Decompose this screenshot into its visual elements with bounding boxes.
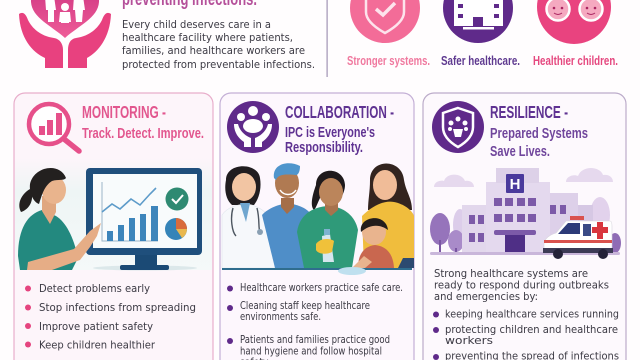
nurse bbox=[18, 168, 101, 270]
bullet list: monitoring bbox=[25, 283, 196, 352]
label: safer healthcare: Safer healthcare. bbox=[441, 53, 520, 68]
hospital bbox=[430, 168, 620, 255]
intro text block: Every child deserves care in a bbox=[122, 19, 271, 31]
icon: hands holding heart with family bbox=[19, 0, 111, 68]
subheading: IPC is everyone's responsibility: IPC is Everyone's bbox=[285, 124, 375, 141]
icon: hospital on purple circle bbox=[443, 0, 513, 43]
resilience text block: Strong healthcare systems are bbox=[434, 268, 588, 280]
bullet list: collaboration: hand hygiene and follow hospital bbox=[240, 346, 382, 358]
bullet list: monitoring: Stop infections from spreading bbox=[39, 302, 196, 314]
subheading: track detect improve: Track. Detect. Improve. bbox=[82, 125, 204, 142]
panel: monitoring bbox=[14, 93, 213, 360]
resilience text block: ready to respond during outbreaks bbox=[434, 280, 609, 292]
bullet list: collaboration: Healthcare workers practice safe care. bbox=[240, 282, 403, 294]
bullet list: monitoring: Improve patient safety bbox=[39, 321, 153, 333]
bullet list: collaboration: Cleaning staff keep healthcare bbox=[240, 300, 370, 312]
icon: children on pink circle bbox=[537, 0, 611, 44]
icon: magnifier with bars bbox=[29, 104, 79, 151]
nurse in blue scrubs bbox=[262, 163, 312, 268]
bullet list: collaboration: environments safe. bbox=[240, 311, 321, 323]
icon: shield with dots bbox=[432, 101, 484, 153]
subheading: prepared systems save lives: Prepared Systems bbox=[490, 125, 588, 142]
resilience text block bbox=[434, 268, 609, 303]
clouds bbox=[434, 168, 613, 187]
intro text block: families, and healthcare workers are bbox=[122, 45, 305, 57]
bullet list: monitoring: Detect problems early bbox=[39, 283, 150, 295]
label: stronger systems: Stronger systems. bbox=[347, 53, 430, 68]
monitor bbox=[86, 168, 202, 270]
subheading: IPC is everyone's responsibility: Responsibility. bbox=[285, 139, 363, 156]
subheading: prepared systems save lives bbox=[490, 125, 588, 160]
hospital: H bbox=[510, 176, 520, 193]
trees bbox=[430, 197, 621, 253]
cleaner in green bbox=[297, 171, 358, 268]
subheading: IPC is everyone's responsibility bbox=[285, 124, 375, 156]
bullet list: resilience bbox=[433, 308, 619, 360]
mother in yellow bbox=[362, 164, 414, 268]
subheading: prepared systems save lives: Save Lives. bbox=[490, 143, 550, 160]
bullet list: resilience: workers bbox=[445, 335, 493, 347]
intro text block bbox=[122, 19, 315, 71]
intro text block: healthcare facility where patients, bbox=[122, 32, 293, 44]
heading: monitoring: MONITORING - bbox=[82, 102, 166, 122]
doctor bbox=[222, 166, 275, 268]
panel: resilience bbox=[423, 93, 626, 360]
heading: collaboration: COLLABORATION - bbox=[285, 102, 394, 122]
bullet list: resilience: protecting children and healthcare bbox=[445, 324, 618, 336]
bullet list: monitoring: Keep children healthier bbox=[39, 340, 156, 352]
intro text block: protected from preventable infections. bbox=[122, 59, 315, 71]
bullet list: collaboration: Patients and families practice good bbox=[240, 334, 390, 346]
resilience text block: and emergencies by: bbox=[434, 291, 538, 303]
illustration: care team and family bbox=[222, 163, 414, 275]
bullet list: resilience: keeping healthcare services running bbox=[445, 308, 619, 320]
heading: resilience: RESILIENCE - bbox=[490, 102, 568, 122]
illustration: nurse at monitor bbox=[15, 158, 212, 270]
bullet list: collaboration bbox=[227, 282, 403, 360]
icon: shield on pink circle bbox=[350, 0, 420, 43]
icon: hands holding people bbox=[227, 101, 279, 153]
ambulance bbox=[543, 216, 613, 259]
illustration: hospital and ambulance bbox=[430, 168, 621, 259]
panel: collaboration bbox=[220, 93, 414, 360]
child bbox=[352, 218, 394, 268]
